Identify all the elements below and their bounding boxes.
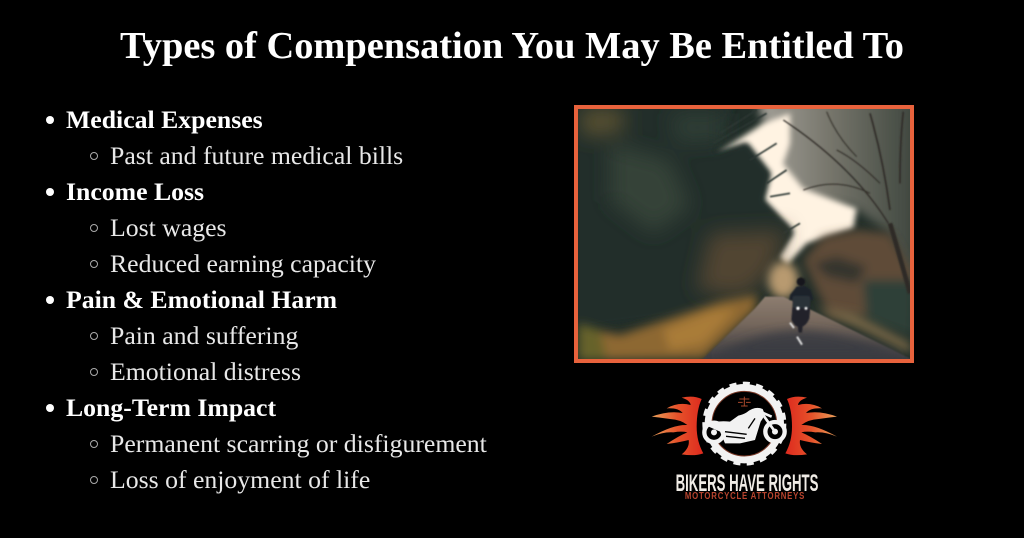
item: emotional distress: Emotional distress [110, 357, 301, 386]
icon: left flames [652, 397, 703, 455]
bullet: medical bills [90, 152, 98, 160]
icon: motorcycle [704, 408, 785, 443]
bullet: scarring [90, 440, 98, 448]
distant haze on the road [768, 262, 798, 298]
item: enjoyment of life: Loss of enjoyment of life [110, 465, 370, 494]
heading: Income Loss: Income Loss [66, 177, 204, 206]
right distant trees [803, 230, 913, 337]
heading: Medical Expenses: Medical Expenses [66, 105, 263, 134]
bullet: enjoyment of life [90, 476, 98, 484]
icon: right flames [785, 397, 837, 455]
rider [789, 277, 813, 333]
item: scarring: Permanent scarring or disfigurement [110, 429, 487, 458]
title: Types of Compensation You May Be Entitled To [120, 25, 904, 67]
bullet: Income Loss [46, 188, 54, 196]
item: medical bills: Past and future medical bills [110, 141, 403, 170]
bullet: pain and suffering [90, 332, 98, 340]
item: earning capacity: Reduced earning capacity [110, 249, 376, 278]
heading: Pain and Emotional Harm: Pain & Emotional Harm [66, 285, 337, 314]
bullet: Pain and Emotional Harm [46, 296, 54, 304]
right tree canopy [752, 109, 910, 272]
photo: motorcyclist on a tree-lined road at sunrise [574, 105, 914, 363]
bullet: emotional distress [90, 368, 98, 376]
logo tagline: MOTORCYCLE ATTORNEYS [685, 491, 805, 502]
logo name: BIKERS HAVE RIGHTS [676, 470, 818, 497]
item: lost wages: Lost wages [110, 213, 227, 242]
heading: Long-Term Impact: Long-Term Impact [66, 393, 276, 422]
bullet: Long-Term Impact [46, 404, 54, 412]
bullet: earning capacity [90, 260, 98, 268]
roadside grass [578, 295, 910, 360]
bullet: Medical Expenses [46, 116, 54, 124]
icon: scales of justice [738, 397, 751, 406]
bullet: lost wages [90, 224, 98, 232]
item: pain and suffering: Pain and suffering [110, 321, 298, 350]
bullet list of compensation types [46, 105, 487, 494]
logo emblem: gear, motorcycle and flames [652, 382, 837, 466]
logo: Bikers Have Rights [652, 382, 837, 502]
icon: gear [704, 384, 784, 464]
sky glow [717, 113, 857, 265]
left tree mass [717, 140, 797, 260]
road [702, 297, 910, 363]
road lane marks [790, 323, 802, 345]
